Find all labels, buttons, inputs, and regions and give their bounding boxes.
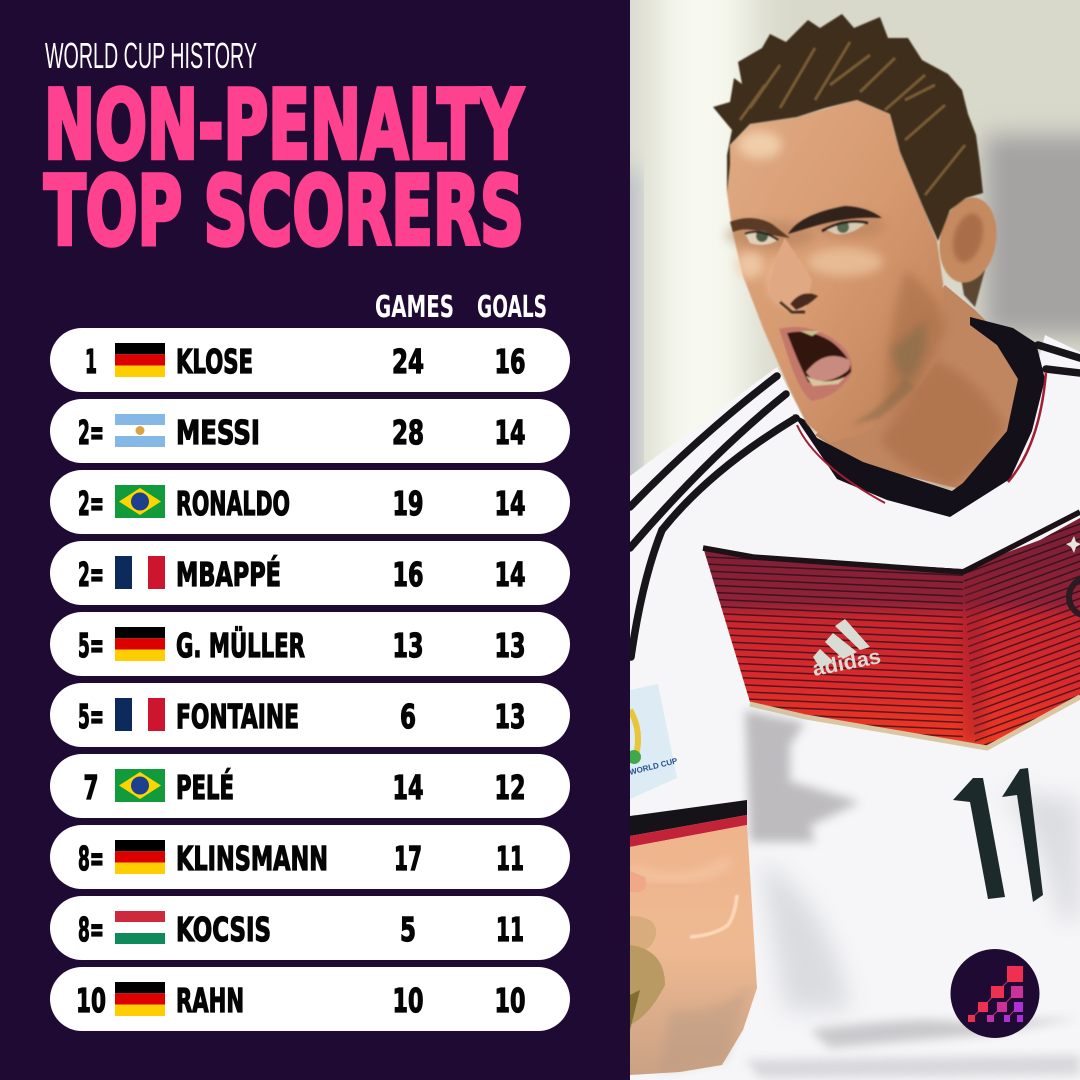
shirt red band bbox=[703, 512, 1080, 747]
row 10: Rahn bbox=[50, 967, 570, 1031]
World Cup sleeve patch: WORLD CUP bbox=[628, 756, 679, 777]
neck bbox=[815, 285, 1025, 490]
shirt body bbox=[630, 335, 1080, 1080]
hair behind ear bbox=[960, 270, 986, 308]
face shading bbox=[725, 131, 945, 425]
row 1: Klose bbox=[50, 328, 570, 392]
row 4: Mbappé: MBAPPÉ bbox=[176, 556, 281, 594]
crest and star bbox=[1066, 536, 1080, 616]
flag: Brazil bbox=[115, 769, 165, 802]
column headers bbox=[375, 290, 547, 325]
adidas logo: adidas bbox=[811, 645, 883, 681]
row 8: Klinsmann bbox=[50, 825, 570, 889]
row 4: Mbappé bbox=[50, 541, 570, 605]
row 2: Messi: 14 bbox=[494, 414, 526, 452]
row 5: G. Müller: 13 bbox=[392, 627, 424, 665]
jersey number 11 bbox=[953, 768, 1043, 902]
shirt collar bbox=[793, 317, 1045, 517]
row 8: Klinsmann: 17 bbox=[394, 840, 422, 878]
row 7: Pelé: PELÉ bbox=[176, 769, 234, 807]
row 5: G. Müller: G. MÜLLER bbox=[176, 627, 305, 665]
row 9: Kocsis: 5 bbox=[400, 911, 416, 949]
row 1: Klose: 16 bbox=[494, 343, 526, 381]
photo: footballer celebrating in Germany shirt bbox=[615, 0, 1080, 1080]
row 5: G. Müller: 5= bbox=[78, 627, 104, 665]
row 5: G. Müller bbox=[50, 612, 570, 676]
face bbox=[727, 100, 945, 443]
title: NON-PENALTY bbox=[44, 71, 524, 181]
kicker: World Cup History: WORLD CUP HISTORY bbox=[45, 35, 257, 76]
row 6: Fontaine: 6 bbox=[400, 698, 416, 736]
flag: Germany bbox=[115, 982, 165, 1016]
World Cup sleeve patch bbox=[627, 684, 679, 799]
title bbox=[44, 71, 524, 267]
row 9: Kocsis: 8= bbox=[78, 911, 104, 949]
row 1: Klose: 1 bbox=[85, 343, 97, 381]
row 8: Klinsmann: 11 bbox=[496, 840, 524, 878]
flag: Germany bbox=[115, 840, 165, 874]
column headers: GAMES bbox=[375, 290, 454, 325]
row 3: Ronaldo bbox=[50, 470, 570, 534]
photo background bbox=[630, 0, 1080, 491]
row 3: Ronaldo: 2= bbox=[78, 485, 104, 523]
flag: Germany bbox=[115, 343, 165, 377]
background panel bbox=[0, 0, 630, 1080]
row 6: Fontaine: FONTAINE bbox=[176, 698, 299, 736]
row 1: Klose: 24 bbox=[392, 343, 424, 381]
row 9: Kocsis: KOCSIS bbox=[176, 911, 271, 949]
hair highlights bbox=[740, 42, 965, 195]
flag: Argentina bbox=[115, 414, 165, 447]
row 2: Messi: 2= bbox=[78, 414, 104, 452]
row 2: Messi: MESSI bbox=[176, 414, 260, 452]
row 8: Klinsmann: KLINSMANN bbox=[176, 840, 328, 878]
row 9: Kocsis bbox=[50, 896, 570, 960]
flag: Germany bbox=[115, 627, 165, 661]
row 4: Mbappé: 2= bbox=[78, 556, 104, 594]
adidas logo bbox=[813, 619, 880, 676]
row 7: Pelé: 7 bbox=[84, 769, 98, 807]
flag: Hungary bbox=[115, 911, 165, 944]
row 7: Pelé: 12 bbox=[494, 769, 526, 807]
eyebrows and eyes bbox=[730, 206, 882, 245]
row 3: Ronaldo: 14 bbox=[494, 485, 526, 523]
shoulder stripes bbox=[630, 345, 1080, 657]
row 4: Mbappé: 14 bbox=[494, 556, 526, 594]
hair bbox=[713, 14, 983, 241]
row 7: Pelé: 14 bbox=[392, 769, 424, 807]
row 10: Rahn: RAHN bbox=[176, 982, 244, 1020]
ear bbox=[938, 196, 998, 284]
row 6: Fontaine bbox=[50, 683, 570, 747]
row 1: Klose: KLOSE bbox=[176, 343, 253, 381]
row 6: Fontaine: 13 bbox=[494, 698, 526, 736]
flag: Brazil bbox=[115, 485, 165, 518]
row 4: Mbappé: 16 bbox=[392, 556, 424, 594]
shirt fold shadows bbox=[745, 710, 1080, 1078]
row 10: Rahn: 10 bbox=[392, 982, 424, 1020]
row 7: Pelé bbox=[50, 754, 570, 818]
flag: France bbox=[115, 556, 165, 589]
row 10: Rahn: 10 bbox=[494, 982, 526, 1020]
row 2: Messi bbox=[50, 399, 570, 463]
flag: France bbox=[115, 698, 165, 731]
row 6: Fontaine: 5= bbox=[78, 698, 104, 736]
row 2: Messi: 28 bbox=[392, 414, 424, 452]
logo badge bbox=[950, 949, 1040, 1038]
forearm and fist bbox=[630, 825, 757, 1075]
row 9: Kocsis: 11 bbox=[496, 911, 524, 949]
column headers: GOALS bbox=[477, 290, 547, 325]
row 3: Ronaldo: 19 bbox=[392, 485, 424, 523]
open mouth bbox=[779, 327, 852, 401]
row 10: Rahn: 10 bbox=[76, 982, 106, 1020]
row 5: G. Müller: 13 bbox=[494, 627, 526, 665]
title: TOP SCORERS bbox=[44, 157, 524, 267]
row 8: Klinsmann: 8= bbox=[78, 840, 104, 878]
sleeve hem bbox=[630, 800, 747, 847]
nose bbox=[769, 238, 818, 312]
row 3: Ronaldo: RONALDO bbox=[176, 485, 290, 523]
shirt trim bbox=[750, 697, 1080, 748]
